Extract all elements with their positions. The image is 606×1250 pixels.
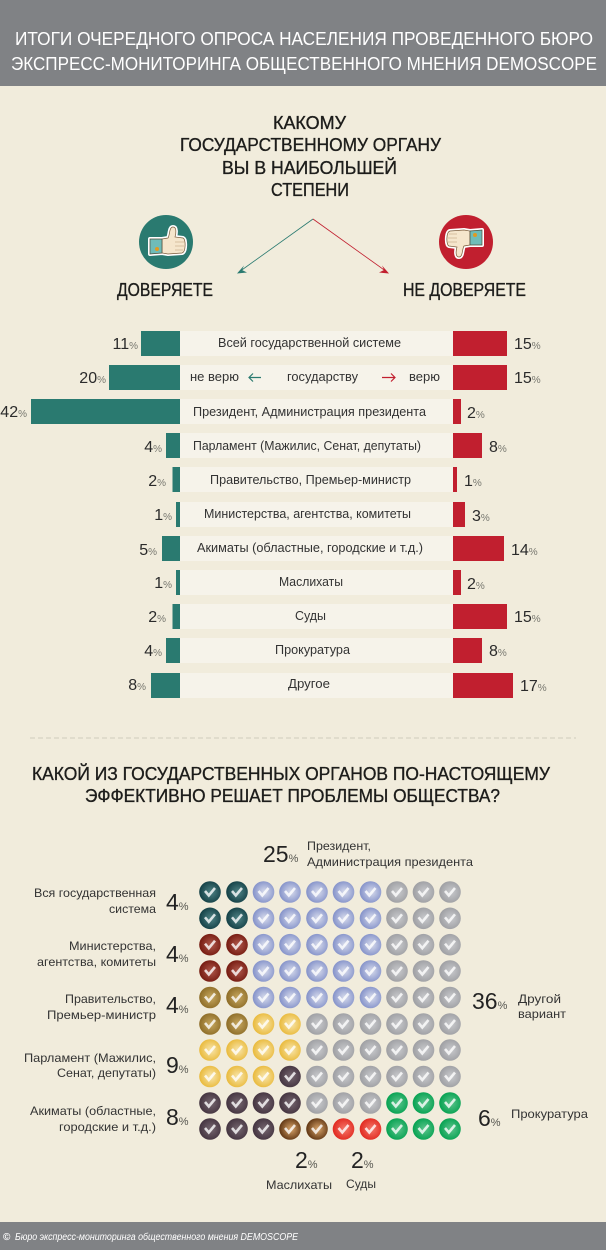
callout: government 4%: Премьер-министр xyxy=(47,1008,156,1022)
row: akimats: 14% xyxy=(511,542,538,559)
callout: ministries 4% xyxy=(37,939,189,969)
callout: other 36%: вариант xyxy=(518,1007,567,1021)
callout: other 36%: 36% xyxy=(472,988,508,1014)
callout: parliament 9%: Сенат, депутаты) xyxy=(57,1066,156,1080)
row: other: 17% xyxy=(520,678,547,695)
row: ministries: 3% xyxy=(472,508,490,525)
row: other: Другое xyxy=(288,677,330,691)
callout: prosecutor 6%: 6% xyxy=(478,1105,501,1131)
row: do not trust the state: 15% xyxy=(514,370,541,387)
row: akimats xyxy=(139,536,538,561)
callout: prosecutor 6% xyxy=(478,1105,588,1131)
footer: © xyxy=(3,1232,11,1243)
footer xyxy=(0,1222,606,1250)
row: whole state system: 15% xyxy=(514,336,541,353)
callout: president 25%: Администрация президента xyxy=(307,855,473,869)
callout: government 4%: 4% xyxy=(166,992,189,1018)
callout: courts 2%: Суды xyxy=(346,1177,376,1191)
row: courts: Суды xyxy=(295,609,326,623)
dots: parliament xyxy=(199,1013,301,1087)
callout: courts 2% xyxy=(346,1147,376,1191)
callout: president 25% xyxy=(263,839,473,869)
row: maslikhats xyxy=(154,570,485,595)
row: akimats: 5% xyxy=(139,542,157,559)
callout: maslikhats 2% xyxy=(266,1147,332,1192)
footer: Бюро экспресс-мониторинга общественного мнения DEMOSCOPE xyxy=(15,1231,298,1243)
row: courts: 2% xyxy=(148,609,166,626)
row: parliament: 8% xyxy=(489,439,507,456)
row: do not trust the state xyxy=(79,365,541,390)
row: government xyxy=(148,467,482,492)
row: whole state system: 11% xyxy=(112,336,138,353)
row: whole state system xyxy=(112,331,541,356)
callout: other 36%: Другой xyxy=(518,992,561,1006)
row: ministries xyxy=(154,502,490,527)
callout: courts 2%: 2% xyxy=(351,1147,374,1173)
row: maslikhats: 1% xyxy=(154,575,172,592)
heading: distrust: НЕ ДОВЕРЯЕТЕ xyxy=(403,280,526,300)
arrow: distrust xyxy=(313,219,389,274)
row: prosecutor: 8% xyxy=(489,643,507,660)
row: do not trust the state: не верю xyxy=(190,370,239,384)
callout: parliament 9%: 9% xyxy=(166,1052,189,1078)
row: president xyxy=(0,399,485,424)
row: prosecutor xyxy=(144,638,507,663)
row: do not trust the state: 20% xyxy=(79,370,106,387)
row: government: 2% xyxy=(148,473,166,490)
callout: akimats 8%: 8% xyxy=(166,1104,189,1130)
callout: whole state system 4%: Вся государственная xyxy=(34,886,156,900)
row: akimats: Акиматы (областные, городские и т.д.) xyxy=(197,541,423,555)
row: courts: 15% xyxy=(514,609,541,626)
header banner xyxy=(0,0,606,86)
callout: ministries 4%: Министерства, xyxy=(69,939,156,953)
dots: akimats xyxy=(199,1066,301,1140)
question heading xyxy=(180,113,442,200)
chart: trust and distrust by state body xyxy=(0,331,547,698)
callout: ministries 4%: агентства, комитеты xyxy=(37,955,156,969)
row: prosecutor: 4% xyxy=(144,643,162,660)
callout: maslikhats 2%: Маслихаты xyxy=(266,1178,332,1192)
callout: other 36% xyxy=(472,988,567,1021)
row: parliament: Парламент (Мажилис, Сенат, депутаты) xyxy=(193,439,421,453)
heading: trust: ДОВЕРЯЕТЕ xyxy=(117,280,213,300)
dots: whole state system xyxy=(199,881,248,929)
row: whole state system: Всей государственной системе xyxy=(218,336,401,350)
callout: parliament 9% xyxy=(24,1051,189,1080)
dots: government xyxy=(199,987,248,1035)
row: parliament: 4% xyxy=(144,439,162,456)
callout: whole state system 4%: 4% xyxy=(166,889,189,915)
callout: whole state system 4%: система xyxy=(109,902,156,916)
row: do not trust the state: государству xyxy=(287,370,359,384)
question heading: ГОСУДАРСТВЕННОМУ ОРГАНУ xyxy=(180,135,442,155)
callout: akimats 8% xyxy=(30,1104,189,1134)
callout: akimats 8%: Акиматы (областные, xyxy=(30,1104,156,1118)
row: courts xyxy=(148,604,541,629)
question heading: ВЫ В НАИБОЛЬШЕЙ xyxy=(222,157,397,178)
callout: akimats 8%: городские и т.д.) xyxy=(59,1120,156,1134)
dots: other option xyxy=(306,881,461,1114)
question heading: СТЕПЕНИ xyxy=(271,180,349,200)
row: ministries: Министерства, агентства, комитеты xyxy=(204,507,411,521)
row: prosecutor: Прокуратура xyxy=(275,643,350,657)
dots: prosecutor xyxy=(386,1092,461,1140)
callout: parliament 9%: Парламент (Мажилис, xyxy=(24,1051,156,1065)
icon: thumbs down xyxy=(439,215,493,269)
row: president: 2% xyxy=(467,405,485,422)
row: government: Правительство, Премьер-министр xyxy=(210,473,411,487)
row: ministries: 1% xyxy=(154,507,172,524)
row: maslikhats: 2% xyxy=(467,576,485,593)
callout: president 25%: 25% xyxy=(263,841,299,867)
dots: courts xyxy=(333,1118,381,1140)
row: parliament xyxy=(144,433,507,458)
callout: ministries 4%: 4% xyxy=(166,941,189,967)
dots: president xyxy=(253,881,381,1008)
second question heading: ЭФФЕКТИВНО РЕШАЕТ ПРОБЛЕМЫ ОБЩЕСТВА? xyxy=(85,786,500,806)
callout: maslikhats 2%: 2% xyxy=(295,1147,318,1173)
header banner: ИТОГИ ОЧЕРЕДНОГО ОПРОСА НАСЕЛЕНИЯ ПРОВЕДЕННОГО БЮРО xyxy=(15,29,593,49)
row: president: Президент, Администрация президента xyxy=(193,405,426,419)
row: maslikhats: Маслихаты xyxy=(279,575,343,589)
dot chart: effective state bodies xyxy=(199,881,461,1140)
arrow: trust xyxy=(237,219,313,274)
callout: prosecutor 6%: Прокуратура xyxy=(511,1107,588,1121)
callout: government 4%: Правительство, xyxy=(65,992,156,1006)
callout: whole state system 4% xyxy=(34,886,189,916)
question heading: КАКОМУ xyxy=(273,113,347,133)
icon: thumbs up xyxy=(139,215,193,269)
callout: government 4% xyxy=(47,992,189,1022)
second question heading: КАКОЙ ИЗ ГОСУДАРСТВЕННЫХ ОРГАНОВ ПО-НАСТОЯЩЕМУ xyxy=(32,763,551,784)
row: do not trust the state: верю xyxy=(409,370,440,384)
row: president: 42% xyxy=(0,404,27,421)
dots: maslikhats xyxy=(279,1118,328,1140)
callout: president 25%: Президент, xyxy=(307,839,371,853)
row: other: 8% xyxy=(128,677,146,694)
dots: ministries xyxy=(199,934,248,982)
row: other xyxy=(128,673,547,698)
row: government: 1% xyxy=(464,473,482,490)
second question heading xyxy=(32,763,551,806)
